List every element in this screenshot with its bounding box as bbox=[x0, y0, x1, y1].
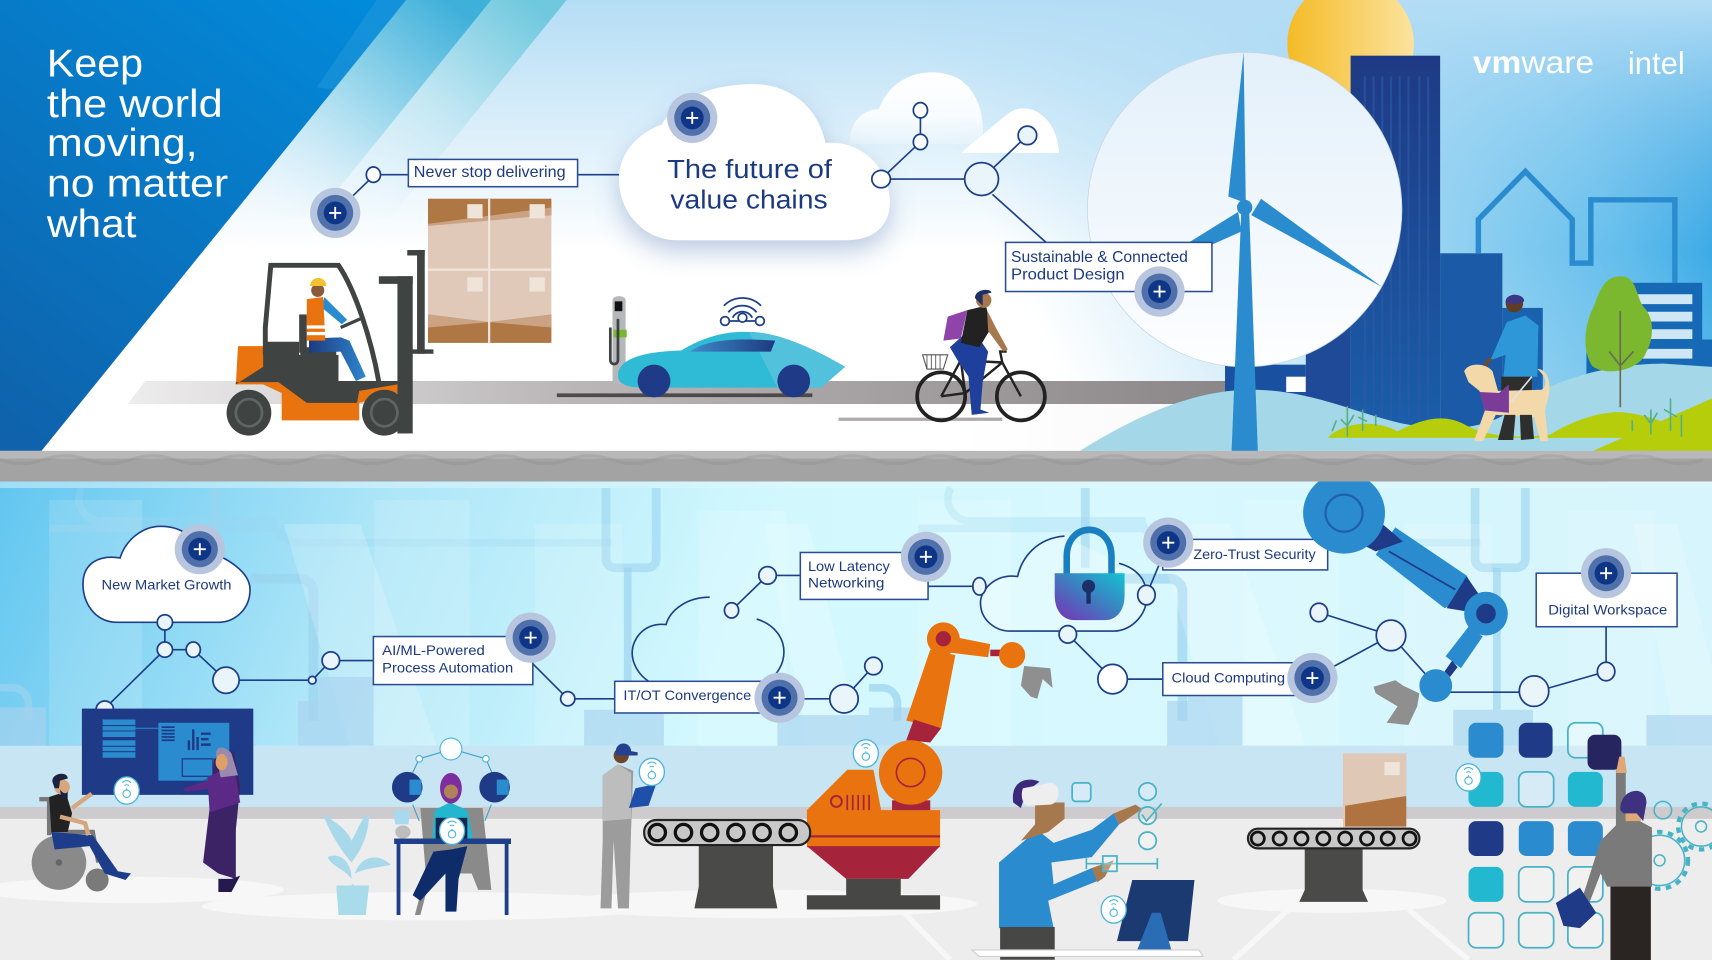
logos: vmware and intel: intel bbox=[1628, 45, 1685, 81]
label: zero-trust security: Zero-Trust Security bbox=[1193, 547, 1317, 563]
wind turbine bbox=[1189, 52, 1382, 451]
label: digital workspace: Digital Workspace bbox=[1548, 603, 1667, 619]
label: AI/ML-powered process automation: Process Automation bbox=[382, 661, 513, 677]
icon: lock on robot bbox=[853, 740, 878, 767]
cloud: new market growth bbox=[83, 526, 250, 622]
blue robot arm bbox=[1303, 473, 1508, 725]
top ground and road bbox=[41, 381, 1712, 451]
label: AI/ML-powered process automation bbox=[373, 637, 533, 685]
label: IT/OT convergence bbox=[615, 681, 781, 713]
VR interface elements bbox=[1072, 783, 1162, 871]
factory background bbox=[0, 482, 1712, 809]
cloud: new market growth: New Market Growth bbox=[102, 578, 231, 594]
label: never stop delivering bbox=[335, 159, 619, 213]
connector network left bbox=[96, 615, 882, 718]
plus button: cloud computing bbox=[1287, 653, 1338, 703]
connector network right bbox=[973, 543, 1615, 706]
VR user bbox=[999, 780, 1142, 960]
connected car bbox=[557, 332, 845, 397]
plus button: digital workspace bbox=[1581, 548, 1631, 598]
blue diagonal panel bbox=[0, 0, 406, 451]
plus button: future of value chains bbox=[667, 93, 717, 143]
sun bbox=[1287, 0, 1414, 107]
man with tablet bbox=[601, 744, 656, 908]
cloud outline with padlock bbox=[928, 530, 1147, 631]
orange robot arm bbox=[807, 622, 1053, 910]
title bbox=[46, 42, 228, 246]
tree bbox=[1585, 276, 1652, 407]
icon: lock on monitor bbox=[1101, 896, 1126, 923]
forklift bbox=[227, 250, 433, 436]
person in wheelchair bbox=[32, 774, 131, 891]
plus button: AI/ML bbox=[506, 613, 556, 663]
cyclist bbox=[839, 290, 1045, 420]
crate on forklift bbox=[428, 199, 551, 343]
right conveyor with box bbox=[1248, 753, 1419, 902]
plants bbox=[1332, 399, 1681, 437]
cloud outline: IT/OT bbox=[632, 567, 800, 681]
title: Keep bbox=[47, 42, 143, 85]
wind turbine disc bbox=[1087, 52, 1402, 367]
dashboard screen bbox=[82, 709, 253, 795]
plus button: IT/OT bbox=[754, 673, 805, 723]
label: sustainable and connected product design: Product Design bbox=[1011, 267, 1125, 284]
left conveyor bbox=[644, 820, 810, 908]
small background clouds bbox=[849, 72, 1059, 153]
top sky background bbox=[0, 0, 1712, 451]
person arranging tiles bbox=[1556, 757, 1652, 960]
woman at dashboard bbox=[183, 747, 240, 892]
icon: lock on dashboard bbox=[114, 777, 139, 804]
plus button: new market growth bbox=[175, 524, 225, 574]
connector network top right bbox=[872, 103, 1046, 242]
title: no matter bbox=[47, 163, 228, 206]
icon: connected circles around desk bbox=[392, 738, 510, 821]
gears bbox=[1631, 801, 1712, 889]
green hills bbox=[1328, 399, 1712, 451]
digital tile grid bbox=[1469, 723, 1621, 948]
person with guide dog bbox=[1464, 295, 1549, 441]
plus button: zero trust bbox=[1143, 518, 1193, 568]
label: sustainable and connected product design bbox=[1006, 242, 1212, 292]
logos: vmware and intel: vmware bbox=[1473, 44, 1594, 80]
main cloud: the future of value chains bbox=[619, 84, 890, 240]
monitor on desk bbox=[972, 880, 1203, 956]
icon: lock on laptop bbox=[439, 817, 465, 845]
main cloud: the future of value chains: value chains bbox=[670, 185, 828, 215]
logos: vmware and intel bbox=[1473, 44, 1685, 81]
label: IT/OT convergence: IT/OT Convergence bbox=[623, 688, 751, 704]
label: zero-trust security bbox=[1163, 539, 1328, 570]
label: AI/ML-powered process automation: AI/ML-Powered bbox=[382, 643, 485, 659]
label: digital workspace bbox=[1536, 573, 1677, 627]
plus button: low latency bbox=[901, 532, 951, 582]
icon: lock near tiles bbox=[1456, 764, 1481, 791]
plus button: never stop delivering bbox=[310, 188, 360, 238]
label: low latency networking bbox=[800, 552, 928, 599]
label: cloud computing: Cloud Computing bbox=[1172, 670, 1285, 686]
label: never stop delivering: Never stop delivering bbox=[414, 164, 566, 181]
woman at desk bbox=[393, 773, 511, 915]
plant bbox=[322, 813, 391, 915]
title: moving, bbox=[47, 122, 198, 165]
factory floor bbox=[0, 807, 1712, 960]
label: cloud computing bbox=[1163, 663, 1312, 696]
icon: car wifi signal bbox=[721, 298, 764, 325]
hills bbox=[1080, 364, 1712, 451]
title: the world bbox=[47, 83, 223, 126]
EV charger bbox=[610, 296, 627, 384]
city buildings bbox=[1225, 56, 1712, 437]
label: sustainable and connected product design: Sustainable & Connected bbox=[1011, 249, 1188, 266]
title: what bbox=[46, 203, 137, 246]
plus button: sustainable design bbox=[1134, 266, 1185, 317]
divider road strip bbox=[0, 451, 1712, 482]
icon: lock beside man bbox=[639, 758, 664, 786]
label: low latency networking: Networking bbox=[808, 575, 884, 591]
label: low latency networking: Low Latency bbox=[808, 559, 891, 575]
main cloud: the future of value chains: The future of bbox=[667, 154, 833, 184]
